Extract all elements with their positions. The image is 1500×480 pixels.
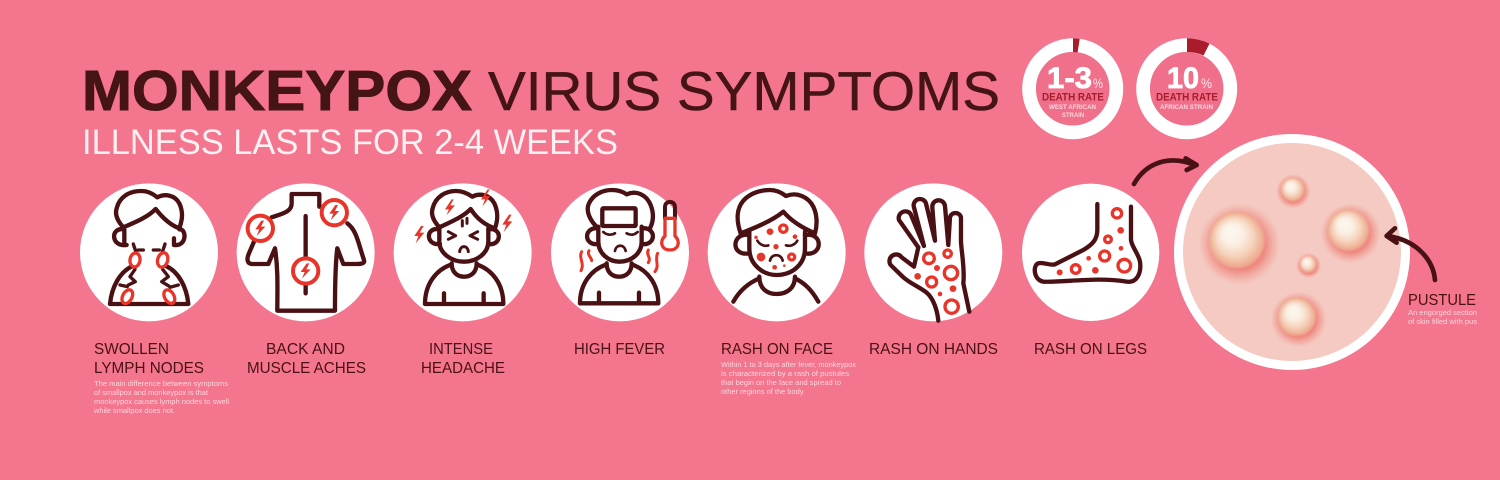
donut: death rate african strain: AFRICAN STRAIN [1160,105,1213,111]
label: rash on face: RASH ON FACE [721,341,833,358]
donut: death rate west african strain [1029,38,1116,132]
donut: death rate west african strain: 1-3 [1047,62,1092,95]
label: rash on face: is characterized by a rash of pustules [721,371,850,378]
donut: death rate west african strain: STRAIN [1062,113,1084,119]
title: VIRUS SYMPTOMS [488,60,1000,122]
label: back and muscle aches: BACK AND [266,341,345,358]
label: swollen lymph nodes: monkeypox causes lymph nodes to swell [94,399,229,406]
label: swollen lymph nodes [93,341,229,415]
arrow: legs to pustule [1134,158,1197,184]
donut: death rate west african strain: DEATH RATE [1042,92,1104,104]
icon: intense headache [394,183,532,321]
label: swollen lymph nodes: The main difference between symptoms [94,381,229,388]
label: rash on face [721,341,857,396]
label: swollen lymph nodes: while smallpox does not. [93,408,175,415]
donut: death rate african strain: DEATH RATE [1156,92,1218,104]
title: MONKEYPOX [82,59,472,123]
label: rash on hands: RASH ON HANDS [869,341,998,358]
donut: death rate african strain: 10 [1167,62,1199,95]
icon: high fever [551,183,689,321]
label: intense headache: INTENSE [429,341,493,358]
donut: death rate african strain: % [1201,75,1212,91]
title [82,59,1000,123]
arrow: pustule label to close-up [1387,228,1435,280]
label: swollen lymph nodes: SWOLLEN [94,341,169,358]
label: rash on face: Within 1 to 3 days after fever, monkeypox [721,362,857,369]
label: high fever: HIGH FEVER [574,341,665,358]
donut: death rate west african strain: WEST AFRICAN [1049,105,1096,111]
label: pustule: An engorged section [1408,310,1477,317]
label: back and muscle aches [247,341,366,377]
icon: back and muscle aches [237,183,375,321]
label: intense headache [421,341,505,377]
label: swollen lymph nodes: of smallpox and monkeypox is that [94,390,208,397]
pustules [1199,174,1381,347]
panel: pustule close-up [1174,134,1410,370]
icon: rash on hands [864,183,1002,321]
label: swollen lymph nodes: LYMPH NODES [94,360,204,377]
icon: rash on legs [1022,184,1159,321]
icon: swollen lymph nodes [80,183,218,321]
label: pustule: PUSTULE [1408,292,1476,309]
subtitle: ILLNESS LASTS FOR 2-4 WEEKS [82,122,618,162]
label: rash on legs: RASH ON LEGS [1034,341,1147,358]
label: back and muscle aches: MUSCLE ACHES [247,360,366,377]
label: pustule: of skin filled with pus [1408,319,1478,326]
icon: rash on face [708,183,846,321]
donut: death rate african strain [1143,38,1230,132]
label: intense headache: HEADACHE [421,360,505,377]
label: rash on face: that begin on the face and spread to [721,380,841,387]
donut: death rate west african strain: % [1093,75,1103,91]
label: rash on face: other regions of the body. [721,389,805,396]
label: pustule [1408,292,1478,326]
